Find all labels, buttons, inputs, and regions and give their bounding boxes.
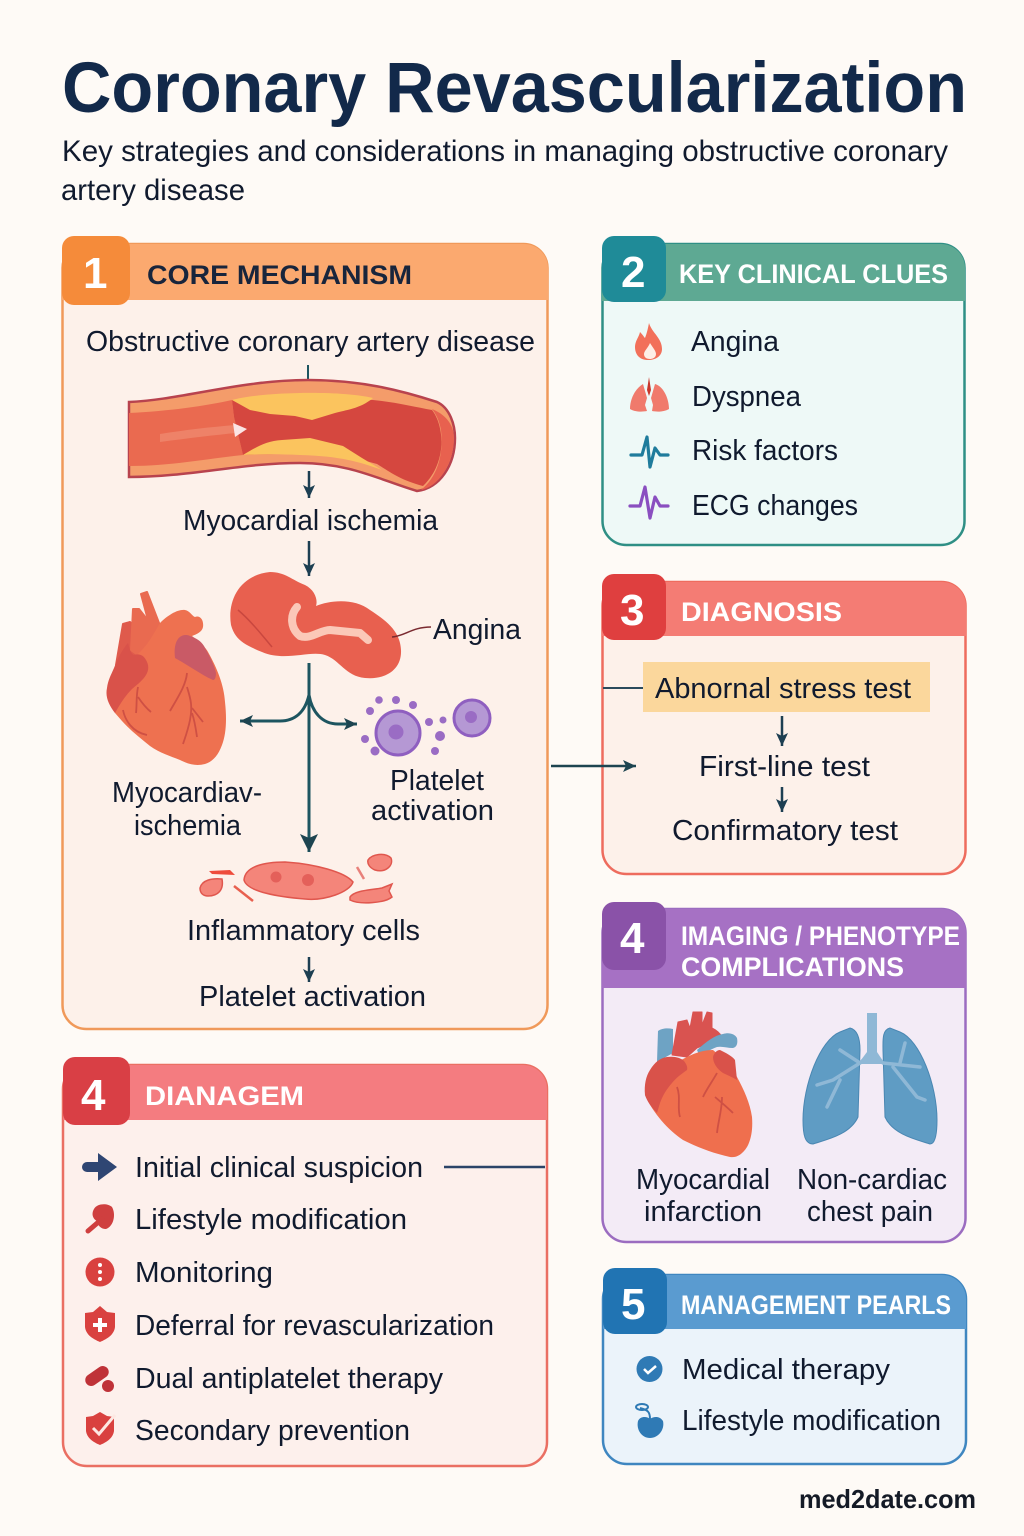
header: dianagem: 4 [81, 1071, 106, 1120]
subtitle [61, 135, 948, 207]
header: key clinical clues: KEY CLINICAL CLUES [679, 259, 948, 289]
header: imaging: 4 [620, 914, 645, 963]
icon: apple [636, 1404, 663, 1438]
illustration: heart [106, 592, 226, 765]
text: angina label: Angina [433, 614, 522, 646]
text: dyspnea: Dyspnea [692, 381, 802, 413]
arrow [308, 471, 310, 498]
icon: monitoring [86, 1258, 114, 1286]
text: lifestyle modification: Lifestyle modification [135, 1204, 407, 1236]
text: risk factors: Risk factors [692, 435, 838, 467]
text: myocardiav-ischemia: Myocardiav- [112, 777, 262, 809]
text: ecg changes: ECG changes [692, 490, 858, 522]
header: management pearls: MANAGEMENT PEARLS [681, 1290, 951, 1320]
header: management pearls [603, 1268, 966, 1334]
text: inflammatory cells: Inflammatory cells [187, 915, 420, 947]
header: imaging [602, 902, 966, 988]
text: platelet activation: Platelet [390, 765, 484, 797]
header: diagnosis [602, 574, 966, 640]
header: imaging: IMAGING / PHENOTYPE [681, 921, 960, 951]
panel: management list [63, 1057, 547, 1466]
header: dianagem: DIANAGEM [145, 1081, 304, 1111]
text: platelet activation: activation [371, 795, 494, 827]
text: medical therapy: Medical therapy [682, 1354, 891, 1386]
text: myocardiav-ischemia [112, 777, 262, 842]
text: platelet activation [371, 765, 494, 827]
text: platelet activation: Platelet activation [199, 981, 426, 1013]
illustration: myocardial tissue [230, 572, 431, 678]
panel: diagnosis [602, 574, 966, 874]
text: obstructive CAD: Obstructive coronary artery disease [86, 326, 535, 358]
header: management pearls: 5 [621, 1280, 645, 1329]
illustration: inflammatory cells [200, 854, 392, 903]
icon: lifestyle [88, 1204, 114, 1231]
header: diagnosis: 3 [620, 586, 644, 635]
arrow [308, 541, 310, 576]
header: core mechanism: CORE MECHANISM [147, 260, 412, 290]
text: myocardial infarction: infarction [644, 1196, 762, 1228]
icon: flame [635, 323, 662, 360]
arrow [308, 957, 310, 982]
text: myocardial infarction [636, 1164, 770, 1228]
text: monitoring: Monitoring [135, 1257, 273, 1289]
icon: ecg pulse [631, 437, 668, 467]
header: dianagem [63, 1057, 547, 1125]
footer: source: med2date.com [799, 1484, 976, 1514]
header: diagnosis: DIAGNOSIS [681, 597, 842, 627]
text: dual antiplatelet therapy: Dual antiplatelet therapy [135, 1363, 443, 1395]
flow arrows [240, 663, 357, 852]
text: lifestyle modification: Lifestyle modification [682, 1405, 941, 1437]
callout: abnormal stress test [643, 662, 930, 712]
panel: core mechanism [62, 236, 548, 1029]
subtitle: artery disease [61, 174, 245, 207]
icon: arrow [82, 1153, 117, 1181]
text: non-cardiac chest pain: chest pain [807, 1196, 933, 1228]
illustration: lungs [803, 1013, 937, 1144]
text: first-line test: First-line test [699, 751, 870, 783]
icon: ecg changes [630, 487, 668, 518]
text: deferral: Deferral for revascularization [135, 1310, 494, 1342]
icon: shield check [86, 1412, 115, 1445]
icon: check circle [636, 1356, 662, 1382]
panel: imaging / phenotype complications [602, 902, 966, 1242]
icon: lungs [630, 377, 669, 412]
icon: shield plus [85, 1306, 115, 1342]
header: core mechanism [62, 236, 548, 305]
text: secondary prevention: Secondary prevention [135, 1415, 410, 1447]
callout: abnormal stress test: Abnornal stress test [655, 673, 911, 705]
arrow: mechanism to diagnosis [551, 765, 636, 767]
panel: management pearls [603, 1268, 966, 1464]
header: imaging: COMPLICATIONS [681, 952, 904, 982]
panel: key clinical clues [602, 236, 965, 545]
text: non-cardiac chest pain: Non-cardiac [797, 1164, 947, 1196]
text: myocardial ischemia: Myocardial ischemia [183, 505, 439, 537]
illustration: heart [645, 1012, 752, 1157]
text: confirmatory test: Confirmatory test [672, 815, 898, 847]
header: key clinical clues: 2 [621, 248, 645, 297]
arrow [781, 716, 783, 746]
arrow [781, 787, 783, 812]
text: non-cardiac chest pain [797, 1164, 947, 1228]
subtitle: Key strategies and considerations in managing obstructive coronary [62, 135, 948, 168]
text: angina: Angina [691, 326, 780, 358]
title: Coronary Revascularization [62, 49, 967, 128]
illustration: narrowed artery [129, 380, 455, 491]
text: initial clinical suspicion: Initial clinical suspicion [135, 1152, 423, 1184]
icon: pills [83, 1364, 114, 1392]
header: core mechanism: 1 [83, 249, 107, 298]
header: key clinical clues [602, 236, 965, 302]
illustration: platelets [361, 696, 490, 756]
text: myocardiav-ischemia: ischemia [134, 810, 242, 842]
text: myocardial infarction: Myocardial [636, 1164, 770, 1196]
